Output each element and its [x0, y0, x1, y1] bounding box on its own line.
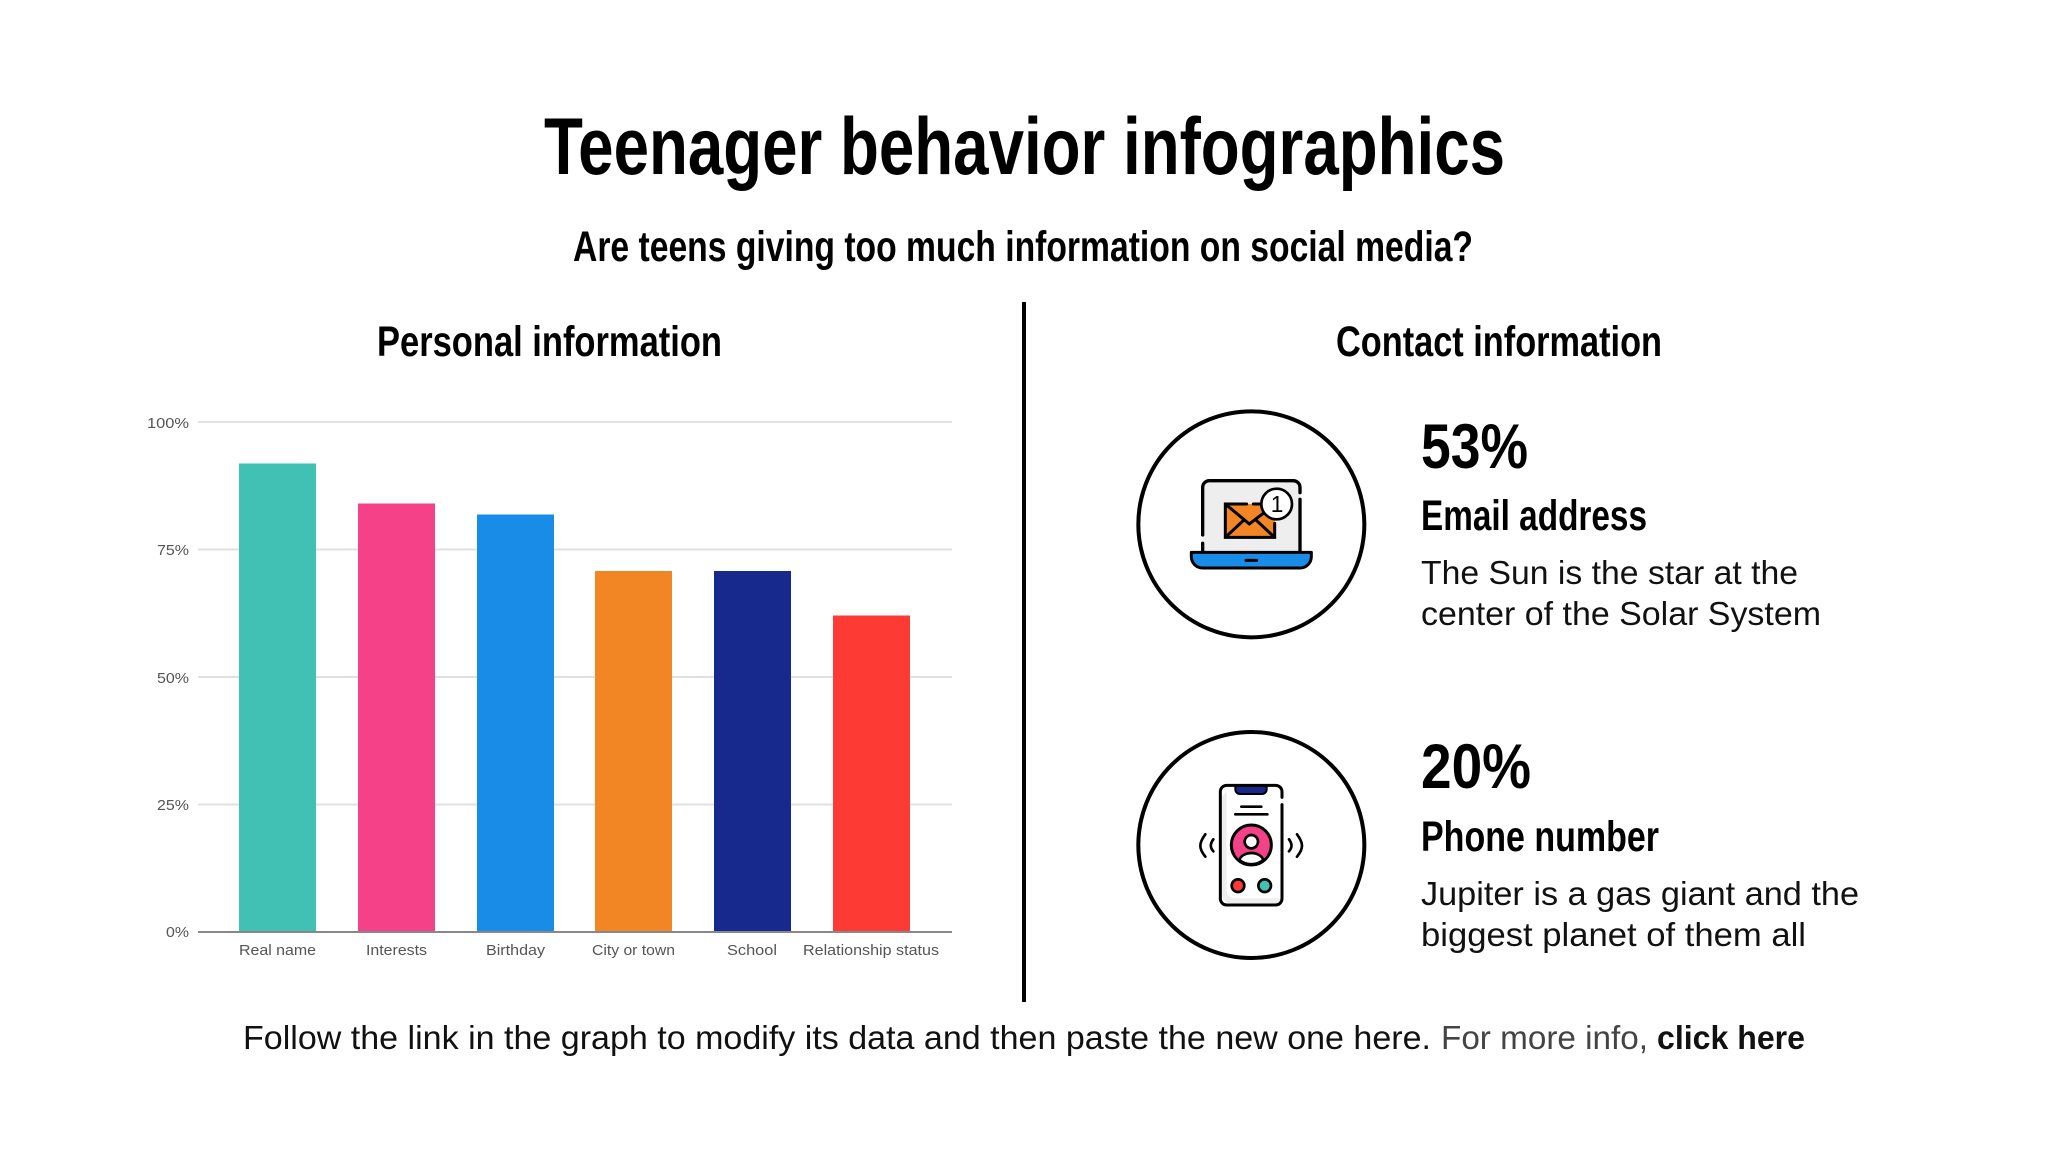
footer note: Follow the link in the graph to modify its data and then paste the new one here. [243, 1019, 1431, 1056]
axis labels: categories: Relationship status [803, 943, 939, 959]
axis labels: categories: Birthday [486, 943, 546, 959]
axis labels: percentages: 0% [166, 925, 189, 941]
stat: phone number: 20% [1421, 732, 1531, 802]
footer note: click here [1657, 1019, 1805, 1056]
bar chart [147, 416, 952, 959]
stat: email address [1421, 412, 1821, 632]
stat: phone number: Phone number [1421, 813, 1659, 861]
stat: email address: The Sun is the star at the [1421, 554, 1798, 591]
heading: personal information: Personal information [377, 318, 722, 366]
bars [239, 464, 910, 932]
icon: phone with contact in circle [1138, 732, 1364, 958]
axis labels: categories [239, 943, 939, 959]
stat: phone number [1421, 732, 1859, 953]
axis labels: categories: Real name [239, 943, 316, 959]
footer note: For more info, [1441, 1019, 1648, 1056]
center divider [1022, 302, 1026, 1002]
title: Teenager behavior infographics [544, 102, 1505, 192]
heading: contact information: Contact information [1336, 318, 1662, 366]
axis labels: categories: Interests [366, 943, 427, 959]
axis labels: categories: School [727, 943, 777, 959]
stat: email address: Email address [1421, 492, 1647, 540]
icon: laptop with email in circle [1138, 411, 1364, 637]
stat: phone number: Jupiter is a gas giant and the [1421, 875, 1859, 912]
axis labels: categories: City or town [592, 943, 675, 959]
stat: email address: center of the Solar System [1421, 595, 1821, 632]
stat: phone number: biggest planet of them all [1421, 916, 1806, 953]
axis labels: percentages: 75% [157, 543, 189, 559]
stat: email address: 53% [1421, 412, 1528, 482]
axis labels: percentages: 25% [157, 798, 189, 814]
axis labels: percentages: 50% [157, 671, 189, 687]
subtitle: Are teens giving too much information on social media? [573, 223, 1473, 271]
axis labels: percentages [147, 416, 189, 941]
icon: laptop with email in circle: 1 [1271, 491, 1283, 517]
axis labels: percentages: 100% [147, 416, 189, 432]
